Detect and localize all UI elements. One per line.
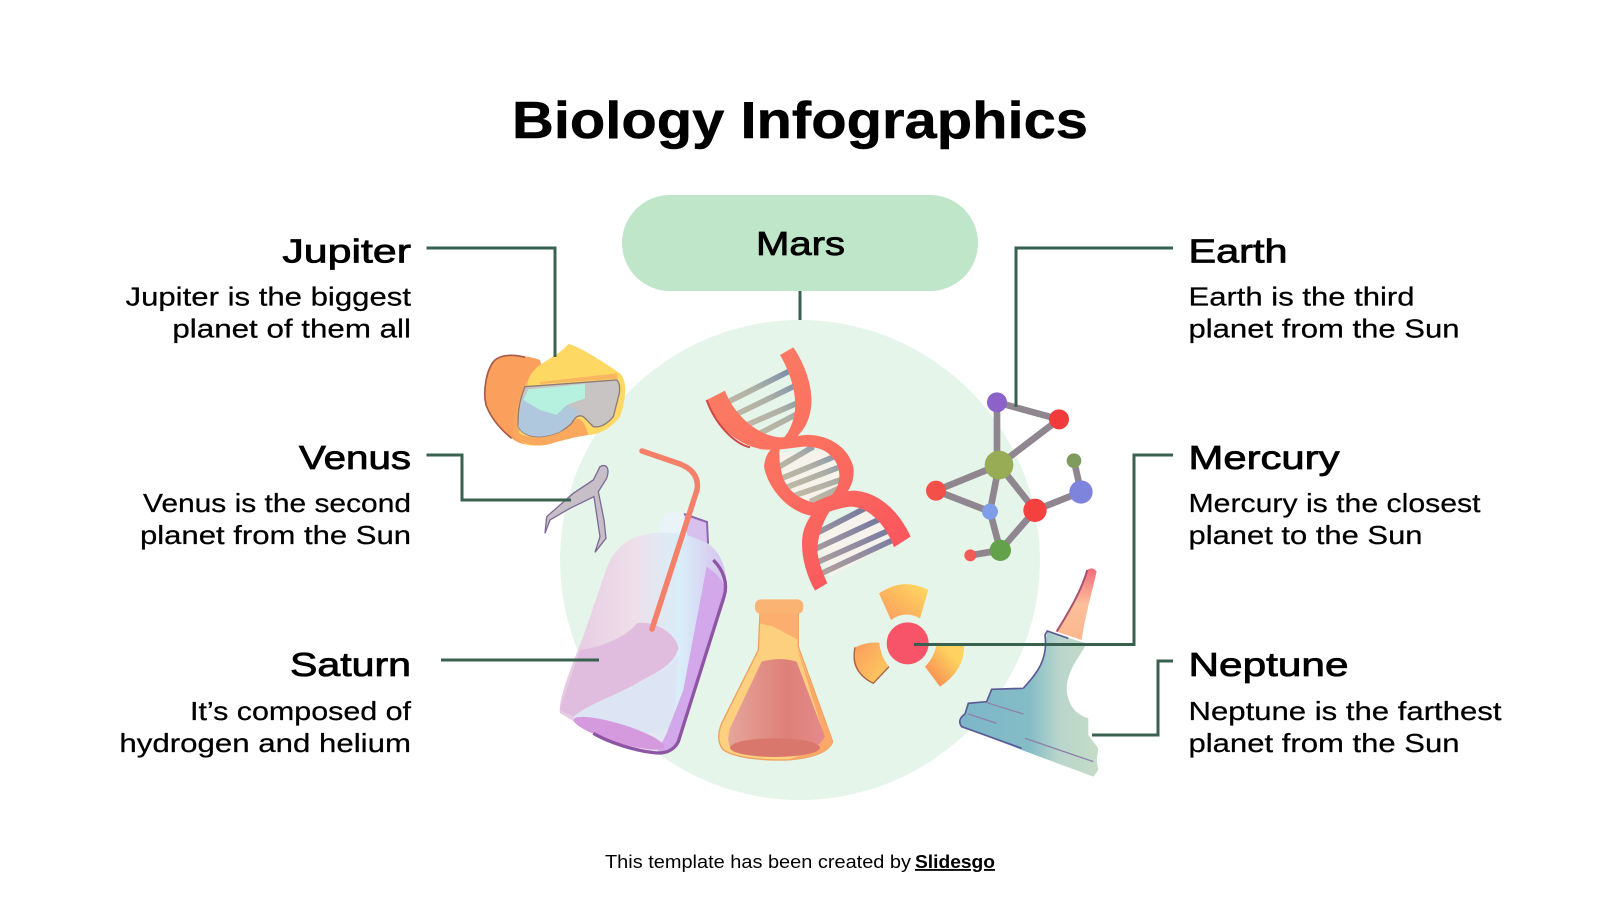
text block: Jupiter bbox=[126, 234, 412, 344]
text block: Venus: Venus is the second bbox=[143, 488, 411, 518]
icon: molecule bbox=[926, 392, 1093, 561]
text block: Saturn bbox=[119, 647, 412, 758]
connector: Jupiter bbox=[426, 248, 555, 357]
heading: Mars: Mars bbox=[756, 226, 845, 263]
text block: Jupiter: Jupiter bbox=[282, 234, 411, 270]
connector: Venus bbox=[426, 455, 571, 500]
bottle straw bbox=[642, 451, 697, 629]
footer credit: This template has been created by bbox=[605, 851, 912, 872]
icon: forceps bbox=[545, 466, 608, 552]
text block: Earth bbox=[1188, 234, 1460, 344]
text block: Jupiter: Jupiter is the biggest bbox=[126, 282, 412, 312]
text block: Neptune: planet from the Sun bbox=[1188, 728, 1460, 758]
icon: goggles bbox=[485, 344, 625, 446]
text block: Jupiter: planet of them all bbox=[172, 314, 411, 344]
text block: Mercury: Mercury is the closest bbox=[1188, 488, 1481, 518]
connector: Earth bbox=[1016, 248, 1173, 407]
text block: Earth: Earth is the third bbox=[1188, 282, 1414, 312]
text block: Mercury: planet to the Sun bbox=[1188, 520, 1422, 550]
connector: Saturn bbox=[441, 658, 599, 662]
text block: Venus: Venus bbox=[299, 440, 411, 477]
footer credit: Slidesgo bbox=[915, 851, 995, 872]
text block: Saturn: Saturn bbox=[290, 647, 411, 684]
text block: Saturn: hydrogen and helium bbox=[119, 728, 411, 758]
connector: Neptune bbox=[1092, 661, 1173, 735]
text block: Neptune: Neptune is the farthest bbox=[1188, 696, 1502, 726]
text block: Mercury: Mercury bbox=[1188, 440, 1340, 477]
icon: erlenmeyer flask bbox=[719, 599, 833, 760]
text block: Neptune: Neptune bbox=[1188, 647, 1348, 684]
connector: Mars to circle bbox=[798, 291, 802, 320]
text block: Earth: Earth bbox=[1188, 234, 1288, 270]
title: Biology Infographics bbox=[512, 92, 1088, 150]
text block: Neptune bbox=[1188, 647, 1502, 758]
icon: wash bottle bbox=[560, 451, 726, 756]
text block: Earth: planet from the Sun bbox=[1188, 314, 1460, 344]
icon: dropper bulb bbox=[960, 568, 1098, 777]
icon: DNA helix bbox=[707, 347, 911, 591]
text block: Mercury bbox=[1188, 440, 1481, 550]
text block: Venus: planet from the Sun bbox=[140, 520, 411, 550]
panel: Mars pill bbox=[622, 195, 978, 291]
icon: radiation symbol bbox=[853, 584, 964, 687]
background circle bbox=[560, 320, 1040, 800]
connector: Mercury bbox=[914, 455, 1173, 644]
text block: Venus bbox=[140, 440, 411, 550]
text block: Saturn: It’s composed of bbox=[190, 696, 412, 726]
